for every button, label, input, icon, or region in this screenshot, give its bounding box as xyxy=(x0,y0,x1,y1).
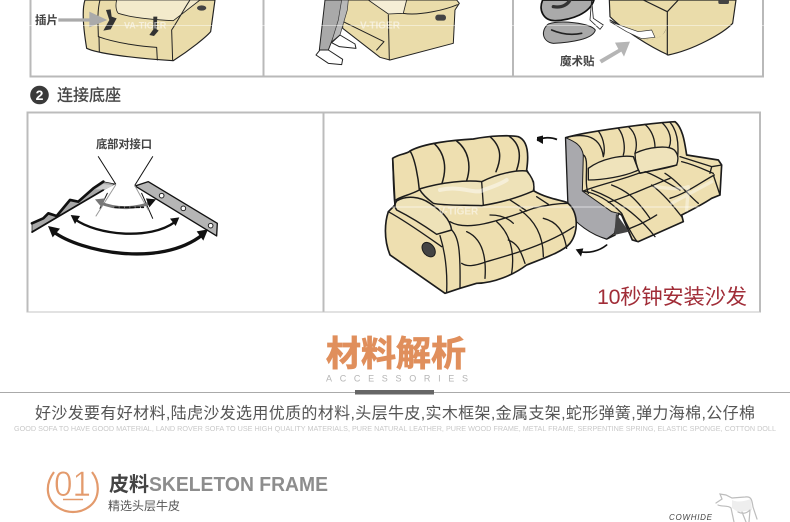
icon: cow sketch xyxy=(716,494,757,522)
decorative image seam xyxy=(375,206,745,208)
illustration: sofa with insert plate xyxy=(58,0,215,61)
heading: step 2 connect the base xyxy=(30,86,121,104)
label: velcro: 魔术贴 xyxy=(560,54,595,68)
heading: leather skeleton frame: SKELETON FRAME xyxy=(149,474,328,496)
arrow head: top curved xyxy=(537,136,543,144)
badge: number 01: 01 xyxy=(54,465,91,504)
illustration: sofa with insert plate: VA-TIGER xyxy=(124,20,167,30)
diagram: base connector xyxy=(32,157,217,254)
heading: step 2 connect the base: 2 xyxy=(36,87,44,103)
illustration: person pushing sofa: V-TIGER xyxy=(360,20,400,31)
arrow: top curved xyxy=(537,138,557,140)
panel: step 1 installation frames xyxy=(0,0,790,76)
illustration: person attaching velcro under sofa xyxy=(541,0,736,63)
arrow: outer arc xyxy=(48,226,208,254)
illustration: left sofa section: V-TIGER xyxy=(438,206,478,217)
section divider xyxy=(0,390,790,394)
heading: leather skeleton frame: 皮料 xyxy=(109,473,149,496)
text block: english intro: GOOD SOFA TO HAVE GOOD MATERIAL, LAND ROVER SOFA TO USE HIGH QUALITY MATERIALS, PURE NATURAL LEATHER, PURE WOOD FRAME, METAL FRAME, SERPENTINE SPRING, ELASTIC SPONGE, COTTON DOLL xyxy=(14,426,776,433)
label: cowhide: COWHIDE xyxy=(669,513,713,522)
section title: materials analysis xyxy=(0,335,790,394)
text block: selected top grain leather: 精选头层牛皮 xyxy=(108,498,180,513)
badge: number 01 xyxy=(48,465,98,512)
illustration: right sofa section xyxy=(566,122,722,257)
illustration: person pushing sofa xyxy=(316,0,459,65)
arrow: inner arc xyxy=(95,198,156,208)
callout: ten second install: 10秒钟安装沙发 xyxy=(597,285,747,309)
illustration: left sofa section xyxy=(385,136,576,293)
label: insert plate: 插片 xyxy=(35,13,58,27)
section title: materials analysis: 材料解析 xyxy=(326,335,466,374)
section subtitle: accessories: ACCESSORIES xyxy=(326,374,468,384)
text block: intro: 好沙发要有好材料,陆虎沙发选用优质的材料,头层牛皮,实木框架,金属支架,蛇形弹簧,弹力海棉,公仔棉 xyxy=(35,404,755,422)
panel: step 2 frames xyxy=(27,112,760,312)
heading: step 2 connect the base: 连接底座 xyxy=(57,86,121,104)
decorative image seam xyxy=(0,24,790,26)
label: base connector: 底部对接口 xyxy=(96,137,152,151)
arrow: middle arc xyxy=(71,215,179,234)
